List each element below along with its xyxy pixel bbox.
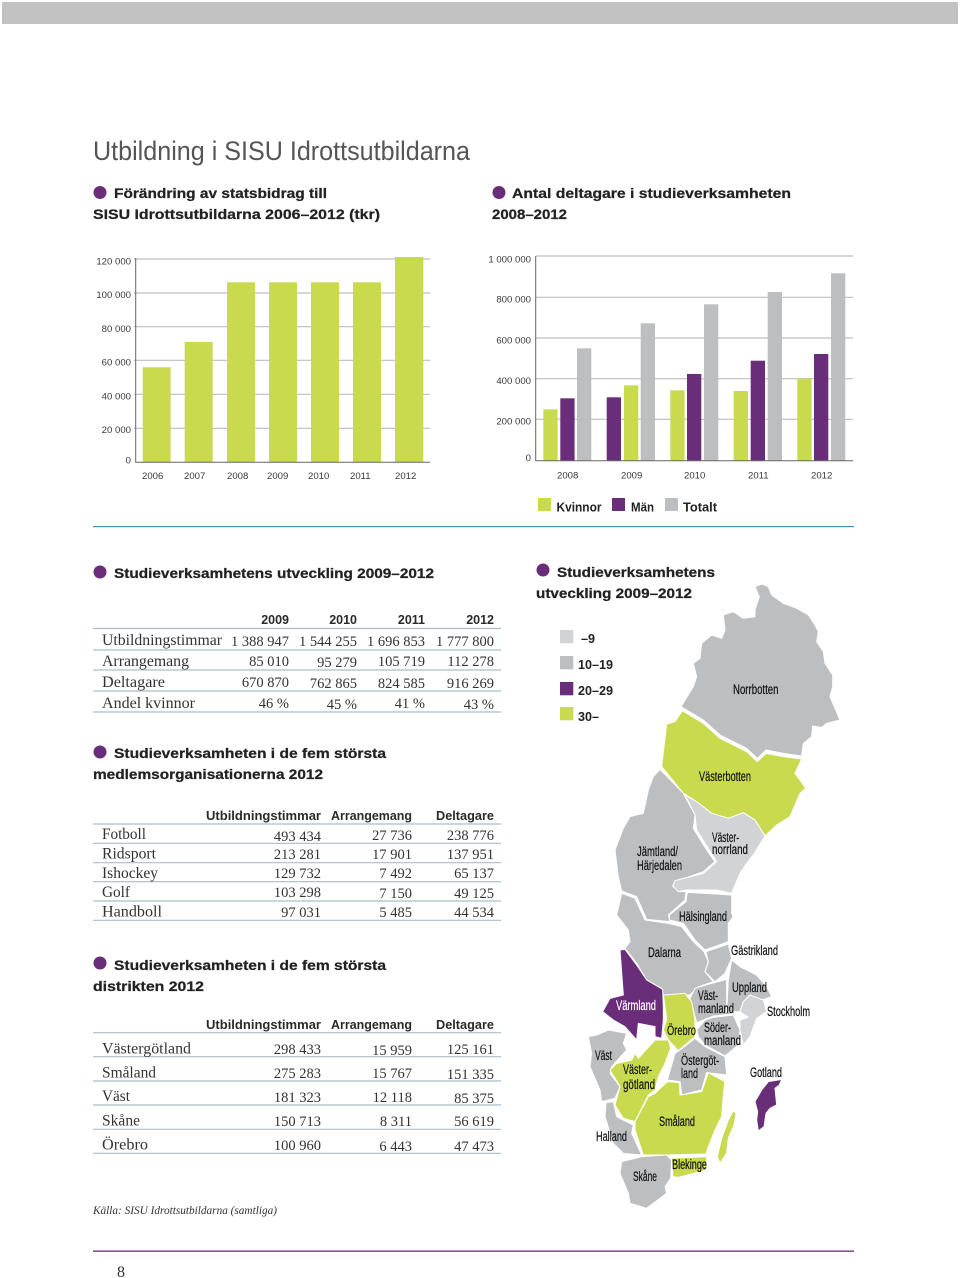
table: utveckling 2009-2012: 670 870 <box>242 675 289 691</box>
bar chart: statsbidrag 2006-2012: 80 000 <box>102 324 131 335</box>
table: medlemsorganisationer: Deltagare <box>436 809 494 823</box>
map labels: Blekinge <box>672 1157 707 1172</box>
table: distrikt: Arrangemang <box>331 1018 412 1032</box>
bar chart: deltagare 2008-2012: 600 000 <box>496 336 531 346</box>
bar chart: statsbidrag 2006-2012 <box>96 256 430 482</box>
table: distrikt: 15 767 <box>372 1066 412 1082</box>
bar chart: statsbidrag 2006-2012: 2010 <box>308 471 329 482</box>
map labels: Väster- <box>623 1062 652 1077</box>
table: medlemsorganisationer: 7 492 <box>379 866 412 882</box>
table: medlemsorganisationer: Ridsport <box>102 846 157 862</box>
bar chart: deltagare 2008-2012 <box>488 254 853 482</box>
table: utveckling 2009-2012: 43 % <box>464 697 494 713</box>
bar chart: deltagare 2008-2012: 2009 <box>621 470 642 482</box>
table: utveckling 2009-2012: 112 278 <box>447 654 494 670</box>
map labels: land <box>681 1066 698 1081</box>
heading: statsbidrag: Förändring av statsbidrag till <box>114 185 327 201</box>
bar chart: statsbidrag 2006-2012: 2012 <box>395 471 416 482</box>
bar chart: deltagare 2008-2012: 400 000 <box>496 376 531 387</box>
map legend: 20–29 <box>578 684 613 698</box>
map labels: Jämtland/ <box>637 844 678 859</box>
table: medlemsorganisationer: 493 434 <box>274 829 322 845</box>
northern regions <box>662 584 840 836</box>
table: utveckling 2009-2012: 1 388 947 <box>231 634 289 650</box>
table: medlemsorganisationer: 7 150 <box>379 886 412 902</box>
map labels: Väst- <box>698 988 718 1003</box>
map labels: Östergöt- <box>681 1053 719 1068</box>
table: utveckling 2009-2012: 95 279 <box>317 655 357 671</box>
map labels: Hälsingland <box>679 909 727 924</box>
table: distrikt: Utbildningstimmar <box>206 1018 321 1032</box>
heading: statsbidrag <box>93 185 380 222</box>
map labels: Örebro <box>667 1023 696 1038</box>
table: utveckling 2009-2012 <box>93 613 501 713</box>
map labels: Skåne <box>633 1169 657 1184</box>
bar chart: statsbidrag 2006-2012: 2007 <box>184 471 205 482</box>
table: distrikt: 85 375 <box>454 1091 494 1107</box>
table: medlemsorganisationer: Fotboll <box>102 826 146 843</box>
table: distrikt: Örebro <box>102 1136 148 1154</box>
heading: statsbidrag: SISU Idrottsutbildarna 2006–2012 (tkr) <box>93 206 380 222</box>
table: medlemsorganisationer: Handboll <box>102 904 162 920</box>
table: utveckling 2009-2012: 2011 <box>398 613 425 627</box>
heading: studieverksamhetens utveckling (map): Studieverksamhetens <box>557 564 715 580</box>
map labels: Värmland <box>616 998 656 1013</box>
bar chart: statsbidrag 2006-2012: 120 000 <box>96 256 131 268</box>
table: medlemsorganisationer: 5 485 <box>379 905 412 921</box>
heading: fem största medlemsorganisationer: medlemsorganisationerna 2012 <box>93 766 323 782</box>
table: distrikt: 275 283 <box>274 1066 321 1082</box>
heading: fem största distrikt: distrikten 2012 <box>93 978 204 994</box>
table: distrikt: 12 118 <box>373 1090 412 1106</box>
table: medlemsorganisationer: Arrangemang <box>331 809 412 823</box>
table: distrikt: Väst <box>102 1088 131 1105</box>
bar chart: deltagare 2008-2012: 0 <box>526 453 531 464</box>
table: medlemsorganisationer: 238 776 <box>447 828 494 844</box>
table: medlemsorganisationer: 137 951 <box>447 847 494 863</box>
map labels: Stockholm <box>767 1004 810 1019</box>
map legend: 10–19 <box>578 658 613 672</box>
table: distrikt: 150 713 <box>274 1114 321 1130</box>
table: utveckling 2009-2012: 45 % <box>327 697 357 713</box>
table: utveckling 2009-2012: 916 269 <box>447 676 494 692</box>
map labels: Småland <box>659 1114 695 1129</box>
middle regions <box>615 769 765 950</box>
heading: antal deltagare: 2008–2012 <box>492 206 567 222</box>
table: medlemsorganisationer <box>93 809 501 921</box>
bar chart: deltagare 2008-2012: 2011 <box>748 470 769 482</box>
table: distrikt: Deltagare <box>436 1018 494 1032</box>
table: utveckling 2009-2012: 46 % <box>259 696 289 712</box>
heading: fem största distrikt: Studieverksamheten i de fem största <box>114 957 386 973</box>
bar chart: deltagare 2008-2012: 2012 <box>811 470 832 482</box>
legend: kvinnor, män, totalt <box>538 498 718 514</box>
bar chart: deltagare 2008-2012: 1 000 000 <box>488 254 531 266</box>
bar chart: statsbidrag 2006-2012: 20 000 <box>102 425 131 436</box>
table: utveckling 2009-2012: Deltagare <box>102 674 165 691</box>
table: distrikt: Skåne <box>102 1112 140 1130</box>
map labels: Söder- <box>704 1020 731 1035</box>
table: utveckling 2009-2012: 41 % <box>395 696 425 712</box>
title: Utbildning i SISU Idrottsutbildarna <box>93 136 471 166</box>
map labels: manland <box>704 1033 741 1048</box>
table: utveckling 2009-2012: 824 585 <box>378 676 425 692</box>
table: utveckling 2009-2012: 1 696 853 <box>367 634 425 650</box>
map legend <box>560 630 613 724</box>
table: distrikt: 181 323 <box>274 1090 321 1106</box>
bar chart: statsbidrag 2006-2012: 2008 <box>227 471 248 482</box>
map labels: Gästrikland <box>731 943 778 958</box>
map labels: Västerbotten <box>699 769 751 784</box>
table: utveckling 2009-2012: 105 719 <box>378 654 425 670</box>
map labels: Dalarna <box>648 945 681 960</box>
bar chart: statsbidrag 2006-2012: 2009 <box>267 471 288 482</box>
map labels: Väst <box>595 1048 612 1063</box>
table: medlemsorganisationer: Utbildningstimmar <box>206 809 321 823</box>
bar chart: deltagare 2008-2012: 800 000 <box>496 294 531 306</box>
bar chart: statsbidrag 2006-2012: 2006 <box>142 471 163 482</box>
table: medlemsorganisationer: 17 901 <box>372 847 412 863</box>
table: medlemsorganisationer: 65 137 <box>454 866 494 882</box>
bar chart: statsbidrag 2006-2012: 2011 <box>350 471 371 482</box>
legend: kvinnor, män, totalt: Män <box>631 500 654 514</box>
bar chart: statsbidrag 2006-2012: 40 000 <box>102 392 131 402</box>
map labels: götland <box>623 1077 655 1092</box>
map legend: –9 <box>581 632 595 646</box>
map labels: Halland <box>596 1129 627 1144</box>
table: medlemsorganisationer: 27 736 <box>372 828 412 844</box>
heading: fem största distrikt <box>93 956 386 994</box>
table: medlemsorganisationer: Ishockey <box>102 865 158 882</box>
table: distrikt: Småland <box>102 1064 156 1082</box>
table: distrikt: Västergötland <box>102 1040 191 1058</box>
table: medlemsorganisationer: Golf <box>102 884 131 901</box>
table: utveckling 2009-2012: 2012 <box>466 613 494 627</box>
heading: studieverksamhetens utveckling (table): Studieverksamhetens utveckling 2009–2012 <box>114 565 434 581</box>
bar chart: deltagare 2008-2012: 200 000 <box>496 416 531 428</box>
map of Sweden <box>588 584 840 1208</box>
heading: antal deltagare: Antal deltagare i studieverksamheten <box>512 185 791 201</box>
table: distrikt <box>93 1018 501 1155</box>
map labels: Härjedalen <box>637 858 682 873</box>
map labels: Gotland <box>750 1065 782 1080</box>
southern regions <box>588 893 782 1208</box>
table: distrikt: 125 161 <box>447 1042 494 1058</box>
table: distrikt: 56 619 <box>454 1114 494 1130</box>
source note: Källa: SISU Idrottsutbildarna (samtliga) <box>92 1205 277 1217</box>
legend: kvinnor, män, totalt: Kvinnor <box>556 500 602 514</box>
map labels <box>595 682 810 1184</box>
bar chart: statsbidrag 2006-2012: 0 <box>126 456 131 466</box>
bar chart: deltagare 2008-2012: 2008 <box>557 470 578 482</box>
table: distrikt: 100 960 <box>274 1138 321 1154</box>
bar chart: statsbidrag 2006-2012: 60 000 <box>102 358 131 368</box>
map labels: Norrbotten <box>733 682 778 697</box>
map labels: Väster- <box>712 830 739 845</box>
table: utveckling 2009-2012: 762 865 <box>310 676 357 692</box>
table: utveckling 2009-2012: 85 010 <box>249 654 289 670</box>
table: utveckling 2009-2012: Utbildningstimmar <box>102 632 223 649</box>
table: distrikt: 47 473 <box>454 1139 494 1155</box>
table: medlemsorganisationer: 129 732 <box>274 866 321 882</box>
table: utveckling 2009-2012: 2010 <box>329 613 357 627</box>
bar chart: deltagare 2008-2012: 2010 <box>684 470 705 482</box>
legend: kvinnor, män, totalt: Totalt <box>683 500 718 514</box>
heading: studieverksamhetens utveckling (map) <box>536 564 715 601</box>
table: distrikt: 8 311 <box>380 1114 412 1130</box>
top grey band <box>2 2 958 24</box>
map labels: Uppland <box>732 980 767 995</box>
map labels: norrland <box>712 842 748 857</box>
heading: fem största medlemsorganisationer: Studieverksamheten i de fem största <box>114 745 386 761</box>
table: distrikt: 151 335 <box>447 1067 494 1083</box>
heading: fem största medlemsorganisationer <box>93 745 386 782</box>
table: medlemsorganisationer: 44 534 <box>454 905 495 921</box>
bar chart: statsbidrag 2006-2012: 100 000 <box>96 290 131 301</box>
map legend: 30– <box>578 710 599 724</box>
table: medlemsorganisationer: 213 281 <box>274 847 321 863</box>
table: medlemsorganisationer: 97 031 <box>281 905 321 921</box>
table: distrikt: 15 959 <box>372 1043 412 1059</box>
heading: studieverksamhetens utveckling (map): utveckling 2009–2012 <box>536 585 692 601</box>
map labels: manland <box>698 1001 734 1016</box>
table: utveckling 2009-2012: Arrangemang <box>102 653 189 670</box>
table: utveckling 2009-2012: 1 544 255 <box>299 634 357 650</box>
table: utveckling 2009-2012: Andel kvinnor <box>102 695 196 712</box>
table: distrikt: 298 433 <box>274 1042 321 1058</box>
table: utveckling 2009-2012: 2009 <box>261 613 289 627</box>
table: medlemsorganisationer: 103 298 <box>274 885 321 901</box>
table: distrikt: 6 443 <box>379 1139 412 1155</box>
table: medlemsorganisationer: 49 125 <box>454 886 494 902</box>
heading: antal deltagare <box>492 185 791 222</box>
table: utveckling 2009-2012: 1 777 800 <box>436 634 494 650</box>
